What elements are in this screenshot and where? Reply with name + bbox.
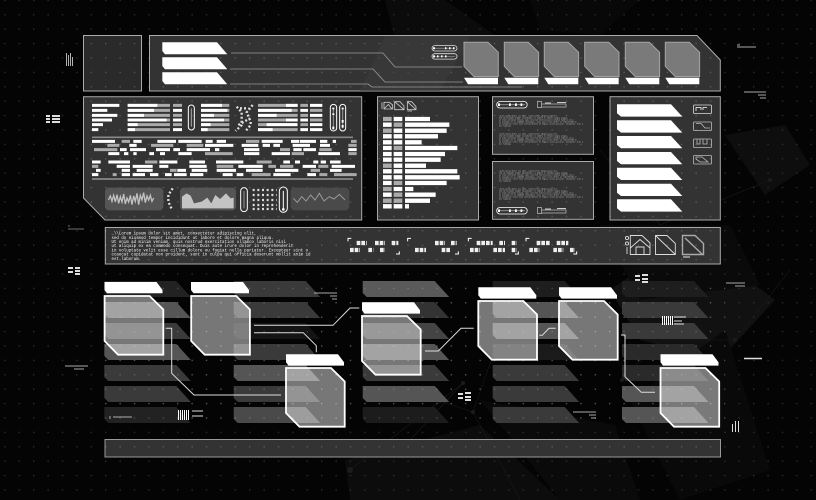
- band text: Ut enim ad minim veniam, quis nostrud exercitation ullamco laboris nisi: [112, 240, 286, 245]
- pills: [188, 104, 346, 131]
- panel: text block lower: [492, 162, 594, 219]
- hexagonal tiles: [105, 296, 719, 427]
- body text: est laborum.: [499, 180, 512, 182]
- chart: area: [180, 188, 236, 210]
- body text: est laborum.: [499, 198, 512, 200]
- band text: [110, 232, 311, 262]
- device glyph: [538, 208, 566, 214]
- circuit connector lines: [230, 53, 522, 87]
- body text: sed do eiusmod tempor incididunt ut labore et dolore magna aliqua.: [499, 172, 568, 174]
- bar rows: [383, 119, 460, 206]
- body text: ut aliquip ex ea commodo consequat. Duis aute irure dolor in reprehenderit: [499, 194, 577, 196]
- band text: _\\Lorem ipsum dolor sit amet, consectetur adipiscing elit,: [110, 232, 256, 237]
- divider: [92, 137, 353, 179]
- icons: [382, 102, 416, 111]
- body text: sed do eiusmod tempor incididunt ut labore et dolore magna aliqua.: [499, 190, 568, 192]
- panel: stripe list: [610, 97, 720, 220]
- panel: text block upper: [492, 97, 594, 154]
- connector lines: [166, 308, 655, 395]
- body text: in voluptate velit esse cillum dolore eu fugiat nulla pariatur. Excepteur sint o: [499, 124, 583, 126]
- chart: noisy waveform: [105, 188, 163, 210]
- band text: ut aliquip ex ea commodo consequat. Duis aute irure dolor in reprehenderit: [112, 244, 294, 249]
- body text: ut aliquip ex ea commodo consequat. Duis aute irure dolor in reprehenderit: [499, 176, 577, 178]
- tile labels: [104, 282, 718, 366]
- band text: est laborum.: [112, 257, 141, 262]
- white stripes: [617, 104, 682, 212]
- background data rows: [100, 276, 725, 426]
- body text: sed do eiusmod tempor incididunt ut labore et dolore magna aliqua.: [499, 118, 568, 120]
- pixel readouts: [348, 238, 577, 254]
- body text: ut aliquip ex ea commodo consequat. Duis aute irure dolor in reprehenderit: [499, 140, 577, 142]
- pill indicator: [497, 102, 527, 108]
- panel: top header strip: [150, 36, 720, 91]
- body text: in voluptate velit esse cillum dolore eu fugiat nulla pariatur. Excepteur sint o: [499, 142, 583, 144]
- data text rows: [92, 141, 357, 175]
- scatter and pills row: [168, 187, 287, 212]
- body text: Ut enim ad minim veniam, quis nostrud exercitation ullamco laboris nisi: [499, 120, 574, 122]
- band text: in voluptate velit esse cillum dolore eu fugiat nulla pariatur. Excepteur sint o: [112, 248, 309, 253]
- chart: line: [291, 188, 349, 210]
- panel: info band: [105, 228, 720, 264]
- panel: ranked bars: [378, 97, 478, 220]
- bar groups: [92, 105, 322, 130]
- body text: in voluptate velit esse cillum dolore eu fugiat nulla pariatur. Excepteur sint o: [499, 196, 583, 198]
- small pills: [432, 46, 457, 59]
- body text: Lorem ipsum dolor sit amet, consectetur adipiscing elit,: [499, 134, 558, 136]
- header white bars: [162, 42, 227, 84]
- body text: sed do eiusmod tempor incididunt ut labore et dolore magna aliqua.: [499, 136, 568, 138]
- side icons: [694, 105, 712, 164]
- tile labels: [464, 78, 699, 84]
- body text: Lorem ipsum dolor sit amet, consectetur adipiscing elit,: [499, 188, 558, 190]
- body text: [499, 116, 583, 146]
- body text: ut aliquip ex ea commodo consequat. Duis aute irure dolor in reprehenderit: [499, 122, 577, 124]
- device glyph: [538, 102, 566, 108]
- scatter dots: [236, 105, 253, 131]
- body text: Ut enim ad minim veniam, quis nostrud exercitation ullamco laboris nisi: [499, 192, 574, 194]
- body text: est laborum.: [499, 126, 512, 128]
- body text: Lorem ipsum dolor sit amet, consectetur adipiscing elit,: [499, 116, 558, 118]
- body text: Ut enim ad minim veniam, quis nostrud exercitation ullamco laboris nisi: [499, 138, 574, 140]
- pill indicator: [497, 208, 527, 214]
- body text: [499, 170, 583, 200]
- header tiles: [464, 42, 700, 77]
- band icons: [625, 236, 704, 257]
- body text: est laborum.: [499, 144, 512, 146]
- body text: in voluptate velit esse cillum dolore eu fugiat nulla pariatur. Excepteur sint o: [499, 178, 583, 180]
- panel: data overview: [84, 97, 362, 220]
- bottom band: [105, 440, 720, 457]
- band text: sed do eiusmod tempor incididunt ut labore et dolore magna aliqua.: [112, 236, 274, 241]
- panel: top left empty: [84, 36, 142, 91]
- body text: Ut enim ad minim veniam, quis nostrud exercitation ullamco laboris nisi: [499, 174, 574, 176]
- margin micro-glyphs: [46, 45, 766, 432]
- band text: ccaecat cupidatat non proident, sunt in culpa qui officia deserunt mollit anim id: [112, 253, 311, 258]
- body text: Lorem ipsum dolor sit amet, consectetur adipiscing elit,: [499, 170, 558, 172]
